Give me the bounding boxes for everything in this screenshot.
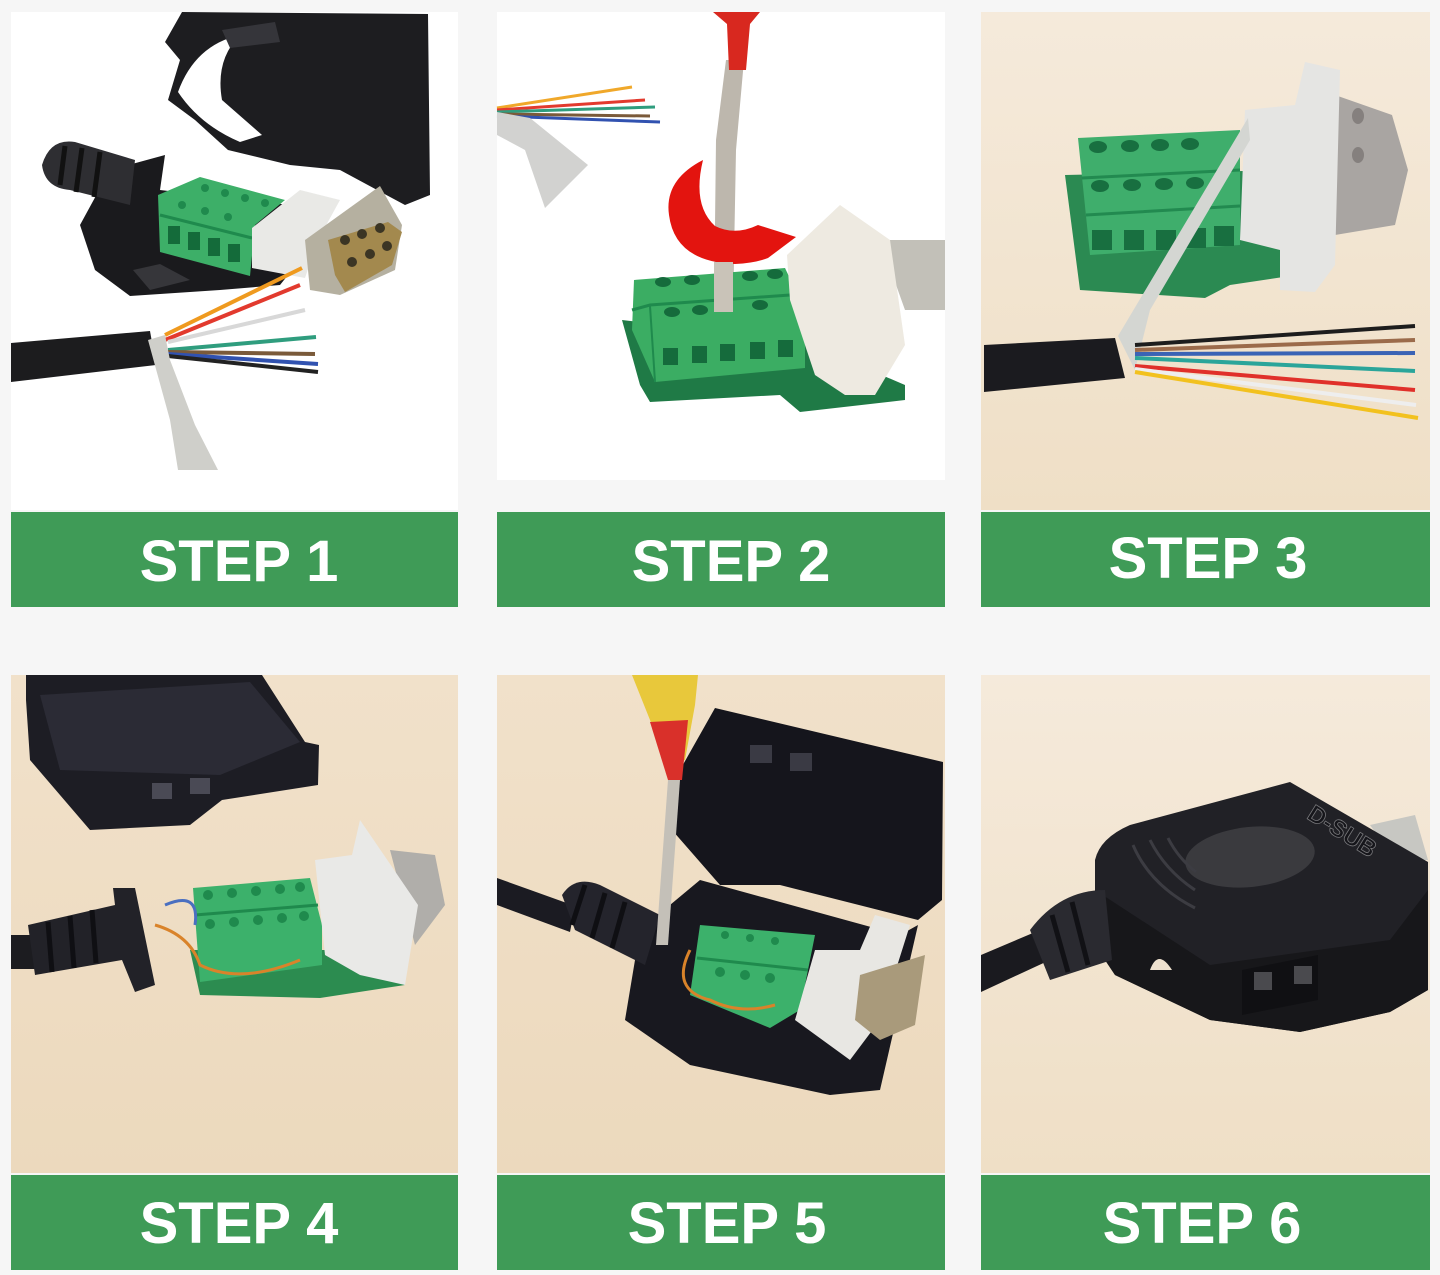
icon: white connector housing (1240, 62, 1340, 292)
panel: step 2 (497, 12, 945, 480)
icon: screwdriver shaft in terminal (714, 262, 733, 312)
icon: strain relief (1030, 890, 1112, 980)
panel: step 6 (981, 675, 1430, 1173)
banner: step 5: STEP 5 (628, 1191, 826, 1256)
icon: rubber strain relief (42, 141, 135, 205)
icon: black cable (11, 935, 41, 969)
banner: step 3: STEP 3 (1109, 526, 1307, 591)
icon: white connector housing (787, 205, 905, 395)
banner: step 2 (497, 512, 945, 607)
icon: black cable (981, 930, 1050, 992)
icon: closed connector housing (1095, 782, 1428, 1032)
banner: step 1 (11, 512, 458, 607)
icon: coloured wires (683, 950, 775, 1009)
icon: window notches (1150, 955, 1318, 1015)
icon: green terminal block (1078, 130, 1240, 255)
icon: metal d-sub plug (1370, 815, 1428, 860)
icon: strain relief (28, 888, 155, 992)
icon: black cover (672, 708, 943, 920)
icon: white connector housing (315, 820, 418, 985)
icon: circuit board (1065, 170, 1330, 298)
icon: circuit board (190, 950, 405, 998)
icon: green terminal block (690, 925, 815, 1028)
icon: metal d-sub plug (390, 850, 445, 945)
icon: black cover (26, 675, 319, 830)
icon: circuit board (622, 320, 905, 412)
icon: mesh oval (1182, 820, 1318, 894)
icon: green terminal block (632, 268, 805, 382)
icon: white connector housing (252, 190, 340, 278)
icon: screwdriver (713, 12, 760, 310)
icon: braided shield (497, 112, 588, 208)
banner: step 2: STEP 2 (632, 529, 830, 594)
icon: black cable (11, 331, 156, 382)
panel: step 5 (497, 675, 945, 1173)
icon: white connector housing (795, 915, 910, 1060)
icon: curved ridges (1133, 838, 1196, 908)
icon: coloured wires (165, 268, 318, 372)
panel: step 3 (981, 12, 1430, 510)
banner: step 3 (981, 512, 1430, 607)
icon: coloured wires (155, 900, 300, 974)
icon: metal d-sub plug (880, 240, 945, 310)
icon: metal d-sub plug (1335, 95, 1408, 235)
banner: step 6: STEP 6 (1103, 1191, 1301, 1256)
banner: step 5 (497, 1175, 945, 1270)
icon: black cable (497, 878, 575, 932)
icon: black connector base (80, 155, 300, 296)
icon: stripped wires (497, 87, 660, 122)
panel: step 1 (11, 12, 458, 510)
icon: strain relief (562, 882, 660, 965)
banner: step 4: STEP 4 (140, 1191, 338, 1256)
icon: black cable (984, 338, 1125, 392)
icon: braided shield (148, 335, 218, 470)
icon: screwdriver (632, 675, 698, 945)
icon: red rotation arrow (668, 160, 796, 264)
icon: black base (625, 880, 918, 1095)
icon: housing side shade (1095, 890, 1428, 1032)
icon: coloured wires (1135, 326, 1418, 418)
banner: step 6 (981, 1175, 1430, 1270)
icon: black connector cover open (165, 12, 430, 205)
icon: green terminal block (158, 177, 285, 276)
icon: metal d-sub plug (855, 955, 925, 1040)
icon: braided shield (1118, 118, 1250, 370)
banner: step 4 (11, 1175, 458, 1270)
banner: step 1: STEP 1 (140, 529, 338, 594)
icon: metal d-sub plug (305, 186, 402, 295)
icon: green terminal block (193, 878, 322, 982)
panel: step 4 (11, 675, 458, 1173)
label: D-SUB moulded text: D-SUB (1303, 800, 1381, 863)
